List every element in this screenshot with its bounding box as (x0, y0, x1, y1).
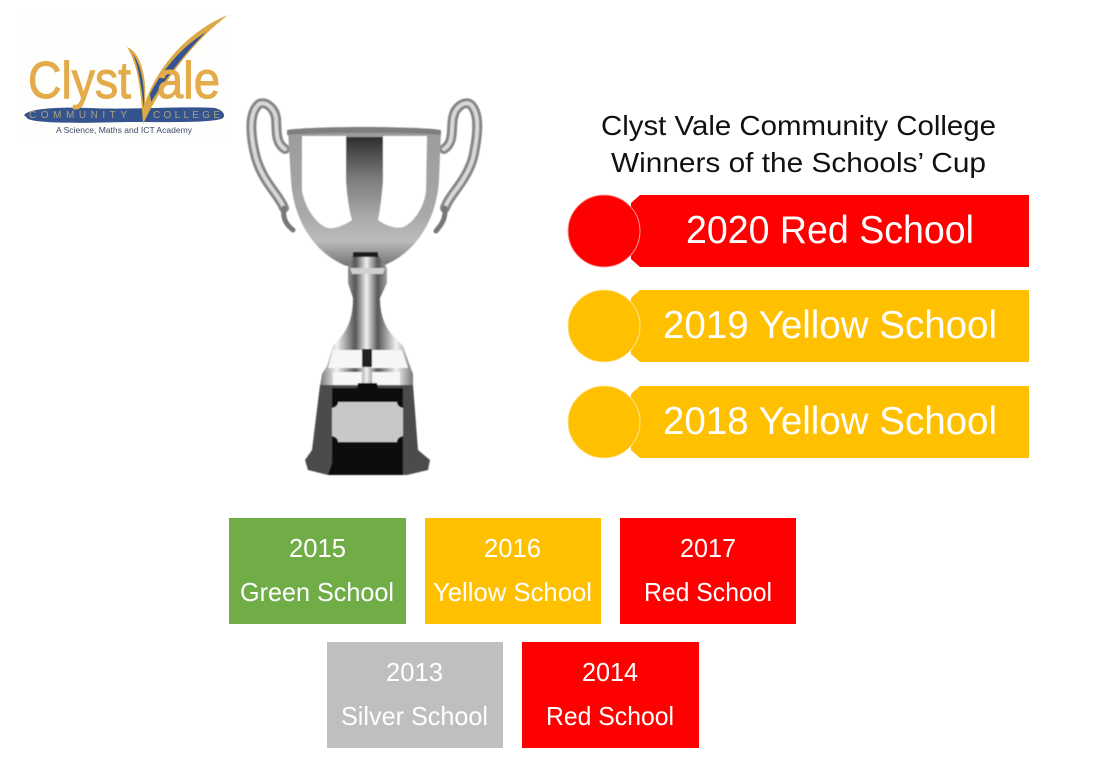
logo college label: COLLEGE (153, 110, 220, 121)
banner: 2019 Yellow School (568, 290, 1029, 362)
logo community label: COMMUNITY (29, 110, 127, 121)
card: 2016 Yellow School (425, 518, 601, 624)
card: 2014 Red School: 2014 (582, 657, 638, 687)
banner: 2019 Yellow School: 2019 Yellow School (663, 304, 997, 347)
logo swoosh band (24, 107, 224, 123)
trophy stem (320, 255, 413, 386)
card: 2014 Red School: Red School (546, 701, 674, 731)
trophy bowl (288, 132, 441, 268)
card: 2017 Red School: Red School (644, 577, 772, 607)
title (601, 110, 996, 178)
trophy base (305, 385, 430, 475)
card: 2015 Green School: 2015 (289, 533, 346, 563)
card: 2013 Silver School (327, 642, 503, 748)
card: 2014 Red School (522, 642, 699, 748)
card: 2015 Green School: Green School (240, 577, 394, 607)
logo: Clyst Vale Community College (17, 15, 228, 143)
card: 2017 Red School: 2017 (680, 533, 736, 563)
logo wordmark: Clyst (28, 52, 131, 110)
banner: 2020 Red School (568, 195, 1029, 267)
title: Winners of the Schools’ Cup (611, 147, 986, 178)
banner: 2018 Yellow School: 2018 Yellow School (663, 400, 997, 443)
card: 2013 Silver School: 2013 (386, 657, 443, 687)
card: 2013 Silver School: Silver School (341, 701, 488, 731)
trophy right handle (436, 103, 477, 231)
banner: 2018 Yellow School (568, 386, 1029, 458)
card: 2016 Yellow School: Yellow School (433, 577, 592, 607)
card: 2015 Green School (229, 518, 406, 624)
title: Clyst Vale Community College (601, 110, 996, 141)
logo wordmark end: ale (157, 52, 220, 110)
card: 2017 Red School (620, 518, 796, 624)
trophy bowl centre reflection (346, 137, 383, 220)
icon: silver trophy (251, 103, 477, 475)
logo tick mark (127, 15, 228, 124)
trophy bowl highlights (302, 136, 352, 228)
card: 2016 Yellow School: 2016 (484, 533, 541, 563)
trophy plaque (332, 402, 403, 442)
banner: 2020 Red School: 2020 Red School (686, 209, 974, 252)
trophy left handle (251, 103, 293, 230)
trophy rim (287, 127, 441, 135)
logo tagline: A Science, Maths and ICT Academy (56, 126, 192, 135)
